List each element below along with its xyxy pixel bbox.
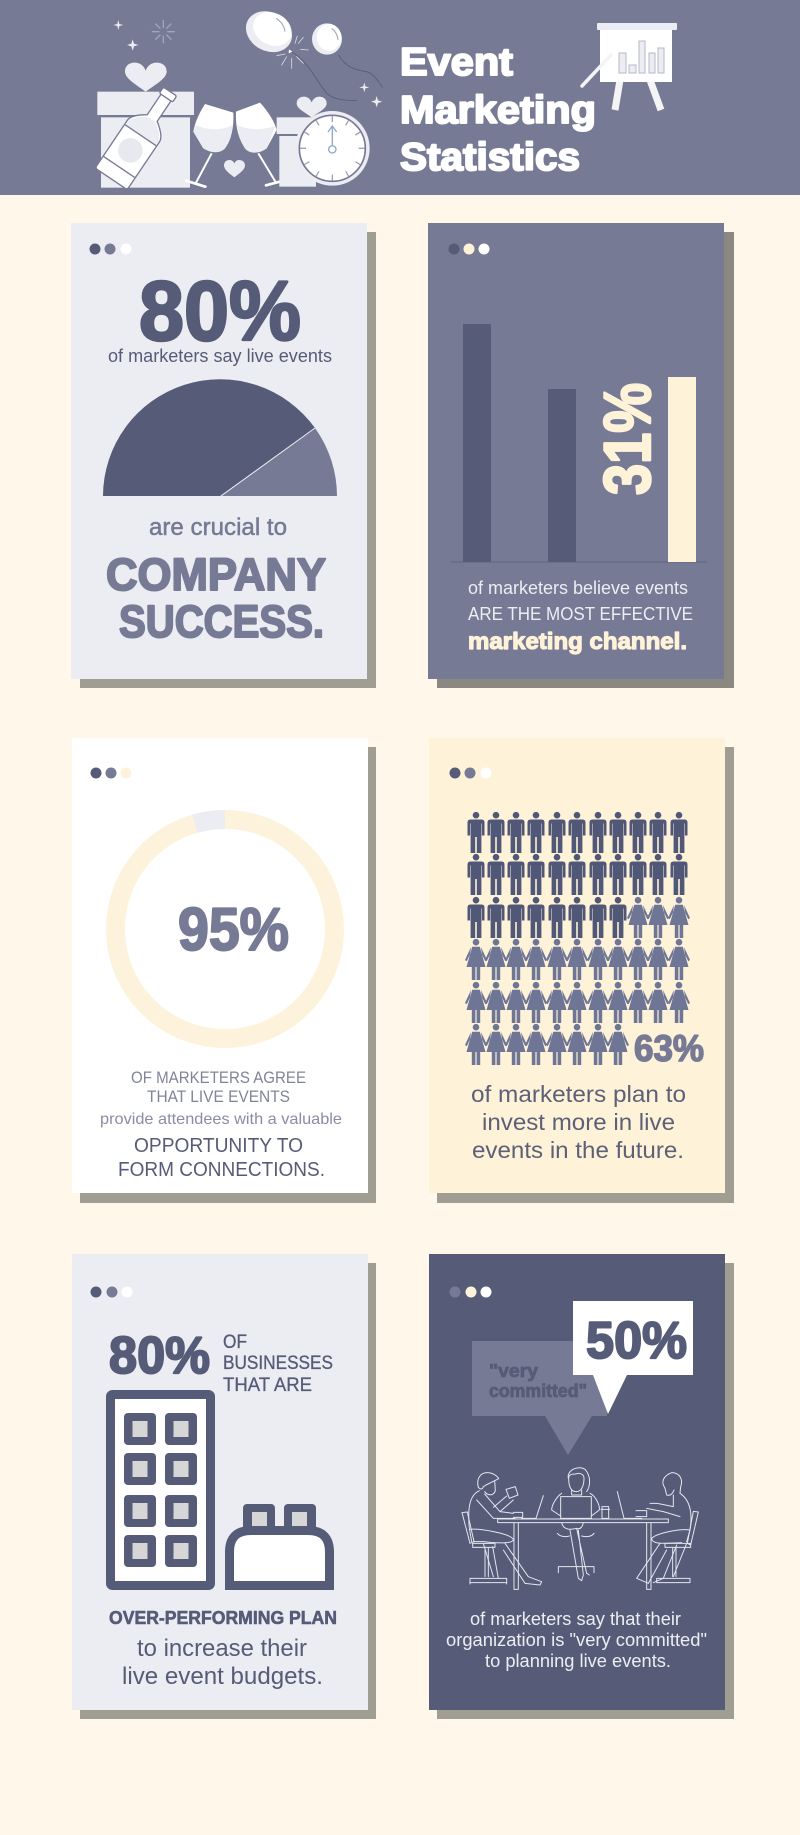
illustration: celebration scene	[95, 3, 383, 190]
icon: wine glass left	[186, 104, 233, 187]
text: opportunity to form connections: OPPORTUNITY TO	[134, 1135, 303, 1157]
panel: 31% most effective channel	[428, 223, 734, 688]
chart: people pictogram	[465, 812, 690, 1065]
panel: 80% of over-performing businesses	[72, 1254, 376, 1719]
text: are the most effective: ARE THE MOST EFFECTIVE	[468, 604, 693, 624]
table	[498, 1519, 668, 1589]
text: to increase their budgets: to increase their	[137, 1635, 307, 1662]
speech bubble: 50%	[573, 1301, 693, 1414]
icon: sparkles	[113, 20, 382, 107]
speech bubble: very committed	[472, 1341, 607, 1455]
panel: 50% very committed	[429, 1254, 734, 1719]
stat: 95%: 95%	[178, 896, 289, 963]
icon: small building	[230, 1504, 330, 1586]
person middle	[552, 1468, 610, 1581]
text: of marketers believe events: of marketers believe events	[468, 578, 688, 598]
stat: 80%: 80%	[109, 1327, 210, 1385]
text: company success: SUCCESS.	[119, 596, 324, 647]
icon: small heart	[224, 160, 245, 177]
text: over-performing plan: OVER-PERFORMING PLAN	[109, 1607, 337, 1628]
title: Statistics	[400, 136, 580, 179]
text: opportunity to form connections: FORM CONNECTIONS.	[118, 1159, 325, 1181]
text: of businesses that are	[223, 1332, 333, 1396]
title: Event	[400, 41, 513, 84]
header banner	[0, 0, 800, 195]
text: very committed to planning	[446, 1608, 707, 1671]
icon: small balloon	[312, 23, 342, 55]
icon: wine glass right	[236, 103, 286, 185]
status dots	[450, 1286, 492, 1298]
title	[400, 41, 596, 179]
speech bubble: very committed: committed"	[489, 1381, 587, 1401]
icon: firework burst	[277, 36, 308, 68]
text: plan to invest: invest more in live	[482, 1109, 675, 1135]
icon: tall building	[110, 1394, 210, 1586]
chart: donut	[116, 819, 334, 1038]
title: Marketing	[400, 89, 596, 132]
text: plan to invest	[471, 1081, 686, 1163]
status dots	[450, 768, 492, 778]
text: company success	[106, 549, 326, 647]
text: are crucial to: are crucial to	[149, 514, 287, 541]
stat: 31%: 31%	[590, 383, 664, 495]
illustration: three people at table	[462, 1468, 698, 1589]
stat: 63%: 63%	[634, 1028, 704, 1069]
text: provide attendees: provide attendees with a valuable	[100, 1111, 342, 1128]
text: to increase their budgets: live event budgets.	[122, 1663, 323, 1690]
text: of businesses that are: OF	[223, 1332, 247, 1353]
speech bubble: very committed: "very	[489, 1361, 538, 1381]
person left	[462, 1473, 543, 1585]
status dots	[90, 768, 132, 778]
text: plan to invest: of marketers plan to	[471, 1081, 686, 1107]
text: plan to invest: events in the future.	[472, 1137, 684, 1163]
person right	[617, 1473, 698, 1583]
icon: balloon strings	[292, 52, 383, 101]
icon: gift box two	[277, 97, 327, 187]
icon: clock	[295, 111, 370, 186]
text: marketing channel: marketing channel.	[468, 628, 687, 654]
text: very committed to planning: to planning live events.	[485, 1650, 671, 1671]
text: company success: COMPANY	[106, 549, 326, 600]
speech bubble: 50%: 50%	[586, 1312, 687, 1370]
icon: firework left	[152, 21, 174, 43]
panel: 63% invest more	[429, 738, 734, 1203]
status dots	[448, 244, 490, 254]
icon: big balloon	[239, 3, 299, 60]
icon: presentation flip chart	[582, 23, 677, 110]
status dots	[90, 1286, 132, 1298]
chart: bar chart	[451, 324, 707, 562]
text: of businesses that are: THAT ARE	[223, 1375, 312, 1396]
text: very committed to planning: of marketers say that their	[470, 1608, 681, 1629]
panel: 95% form connections	[72, 738, 376, 1203]
status dots	[90, 244, 132, 254]
text: very committed to planning: organization is "very committed"	[446, 1629, 707, 1650]
stat: 80%: 80%	[139, 264, 301, 358]
text: that live events: THAT LIVE EVENTS	[147, 1088, 290, 1106]
text: of marketers agree: OF MARKETERS AGREE	[131, 1069, 306, 1087]
text: of businesses that are: BUSINESSES	[223, 1353, 333, 1374]
chart: semicircle gauge	[103, 379, 337, 496]
text: opportunity to form connections	[118, 1135, 325, 1181]
text: to increase their budgets	[122, 1635, 323, 1690]
text: of marketers say live events: of marketers say live events	[108, 346, 332, 366]
icon: champagne bottle	[95, 81, 186, 190]
icon: gift box one	[97, 63, 194, 188]
panel: 80% crucial to company success	[71, 223, 376, 688]
